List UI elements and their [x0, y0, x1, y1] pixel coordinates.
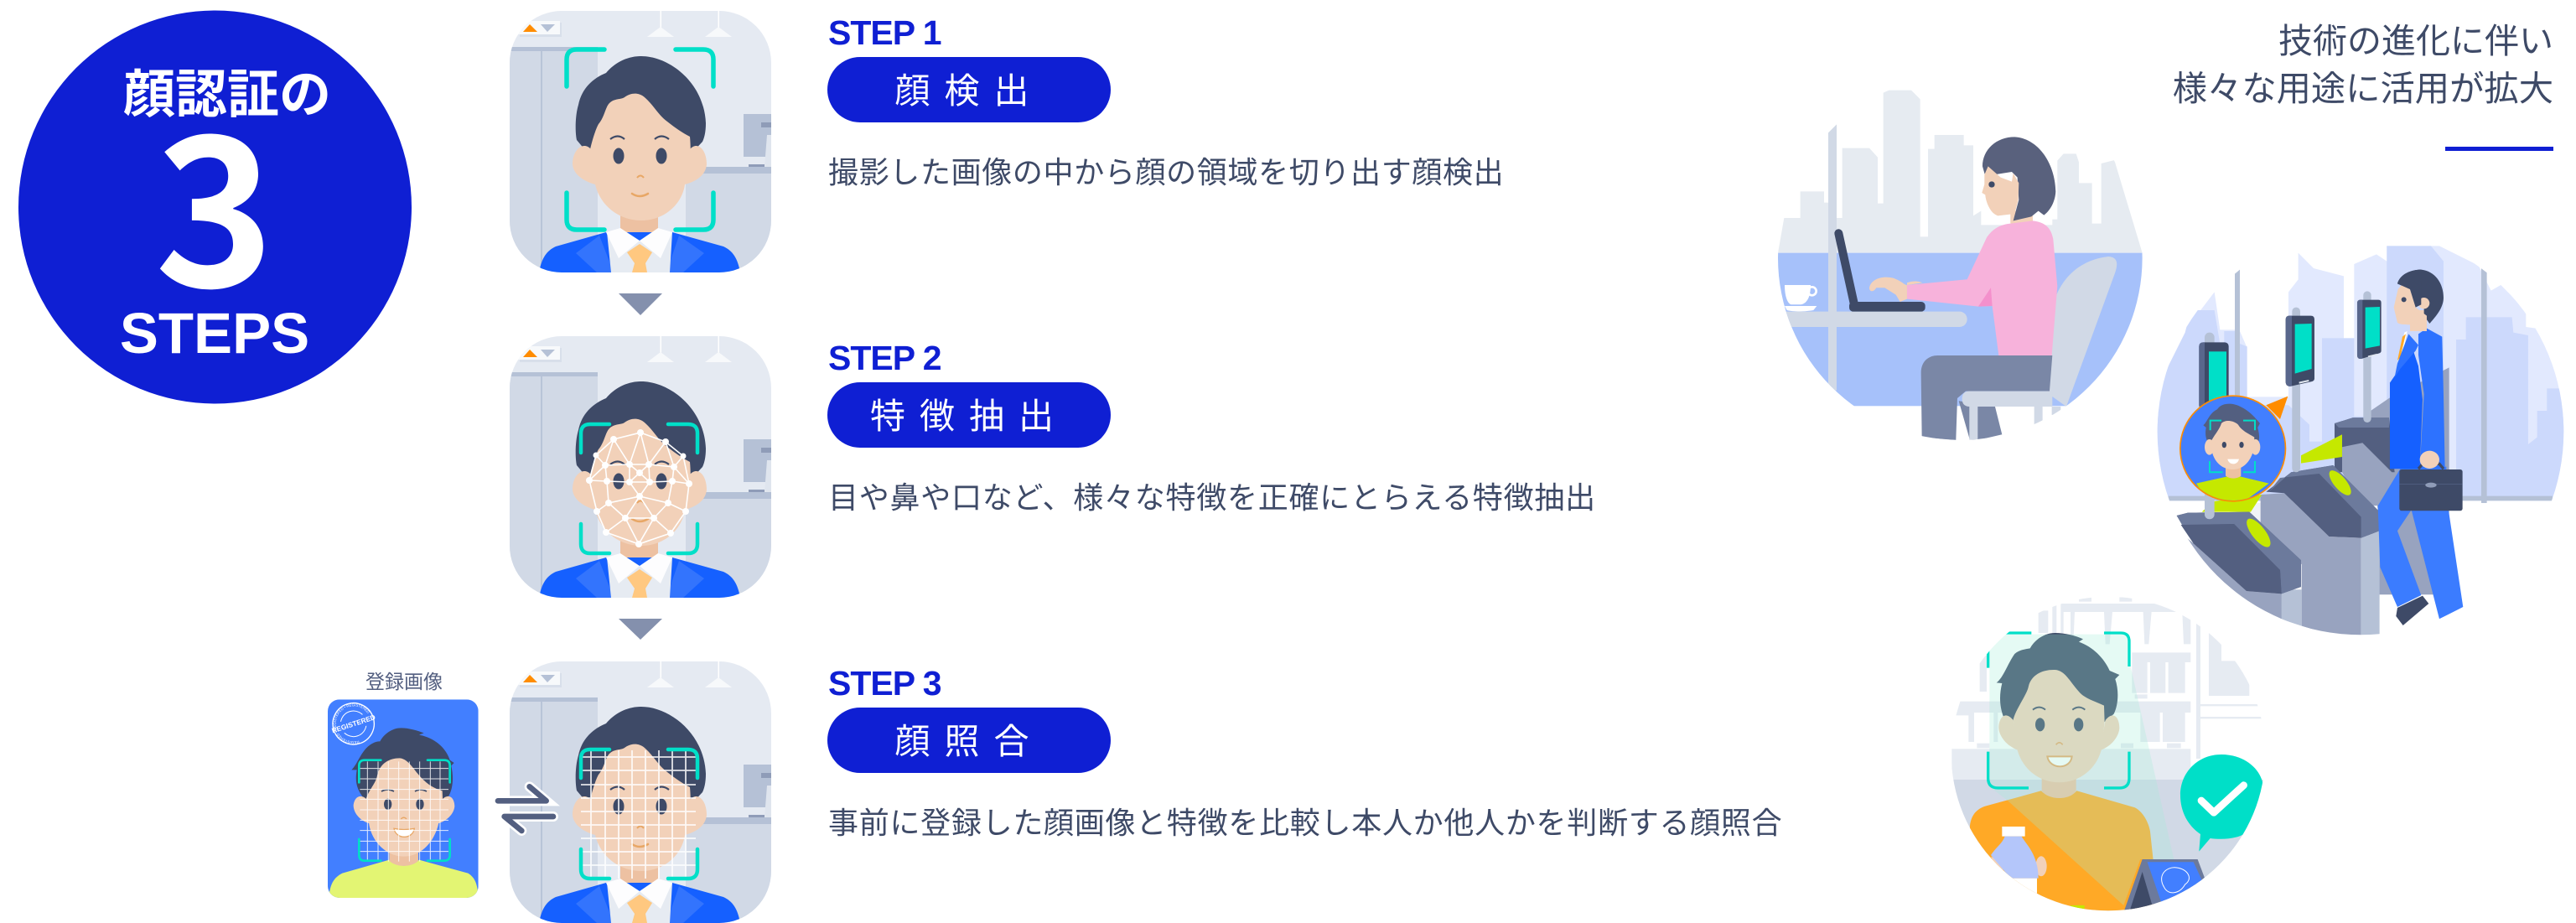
panel: registered photo — [328, 699, 479, 898]
middle gate — [2266, 465, 2379, 538]
green patch — [2071, 905, 2085, 912]
callout: face match bubble — [2179, 395, 2288, 506]
heading: 顔認証の: 顔認証の — [123, 52, 331, 127]
badge circle — [18, 10, 412, 404]
gate terminals — [2199, 291, 2382, 519]
shirt — [329, 860, 479, 898]
skyline light — [2201, 246, 2558, 469]
icon: exchange arrows — [498, 786, 553, 831]
skyline dark — [2154, 246, 2573, 500]
detection brackets — [359, 760, 450, 861]
coffee cup — [1785, 285, 1817, 311]
shirt — [1970, 791, 2154, 912]
middle gate column — [2249, 493, 2380, 635]
step label: STEP 2 — [828, 339, 941, 377]
facial feature mesh — [586, 429, 692, 547]
neck — [2010, 211, 2033, 224]
chair seat — [1962, 391, 2052, 407]
label: registered image: 登録画像 — [365, 671, 443, 692]
panel: step 3 face image — [510, 661, 771, 923]
panel: step 3 text: 顔照合 — [894, 722, 1044, 761]
table — [1773, 312, 1967, 327]
panel: step 2 text: 特徴抽出 — [870, 397, 1068, 436]
panel: step 3 text — [827, 664, 1782, 840]
arrow: step 2 to 3 — [619, 619, 662, 640]
green beams — [2202, 434, 2342, 512]
illustration: store face payment — [1945, 597, 2272, 914]
big number 3: 3 — [155, 51, 274, 345]
icon: registered stamp: REGISTERED — [330, 713, 376, 734]
ears and face — [354, 796, 454, 823]
text block: use-case caption: 技術の進化に伴い — [2278, 22, 2553, 60]
rear gate — [2335, 367, 2449, 594]
skyline — [1778, 91, 2143, 253]
step label: STEP 3 — [828, 664, 941, 703]
trousers — [1921, 355, 2052, 440]
floor line — [2169, 496, 2553, 500]
panel: step 2 face image — [510, 336, 771, 598]
sweater — [1907, 220, 2057, 355]
panel: step 1 text — [827, 13, 1504, 189]
text block: use-case caption — [2173, 22, 2553, 151]
neck — [389, 853, 418, 866]
neck — [2042, 770, 2076, 798]
scan beam — [1989, 635, 2174, 905]
panel: step 1 text: 顔検出 — [894, 71, 1044, 111]
icon: approval check bubble — [2180, 754, 2263, 852]
illustration: face-recognition ticket gates — [2154, 246, 2573, 635]
hand — [1869, 277, 1922, 302]
arrow: step 1 to 2 — [619, 293, 662, 315]
blue window area — [1773, 253, 2148, 406]
detection brackets — [567, 49, 713, 230]
hair — [1997, 633, 2119, 723]
caption rule — [2445, 147, 2553, 151]
window frame — [1828, 124, 1837, 391]
counter wall — [1945, 780, 2272, 914]
pill heading — [827, 708, 1111, 773]
panel: step 2 text — [827, 339, 1596, 515]
shelves background — [1951, 597, 2263, 780]
panel: step 1 face image — [510, 11, 771, 272]
detection brackets — [1988, 633, 2129, 788]
ears and face — [1998, 715, 2119, 750]
pill heading — [827, 57, 1111, 122]
description: 撮影した画像の中から顔の領域を切り出す顔検出 — [828, 155, 1504, 189]
description: 事前に登録した顔画像と特徴を比較し本人か他人かを判断する顔照合 — [828, 806, 1782, 840]
label: STEPS: STEPS — [120, 301, 309, 366]
chair — [1969, 257, 2117, 440]
comparison grid — [581, 750, 696, 879]
walking man — [2378, 270, 2463, 625]
tablet — [2123, 859, 2206, 912]
front gate — [2177, 512, 2301, 620]
pill heading — [827, 382, 1111, 448]
icon: registered stamp: REGISTERED • REGISTERED • REGISTERED — [334, 703, 369, 744]
illustration: woman at laptop — [1773, 91, 2148, 440]
step label: STEP 1 — [828, 13, 941, 52]
bottle — [1991, 827, 2047, 912]
hair — [351, 728, 454, 799]
panel: title badge — [18, 10, 412, 404]
description: 目や鼻や口など、様々な特徴を正確にとらえる特徴抽出 — [828, 480, 1596, 515]
woman's head — [1982, 137, 2055, 220]
laptop — [1838, 233, 1926, 312]
comparison grid — [360, 761, 448, 862]
glass poles — [2235, 268, 2487, 503]
text block: use-case caption: 様々な用途に活用が拡大 — [2173, 70, 2553, 108]
